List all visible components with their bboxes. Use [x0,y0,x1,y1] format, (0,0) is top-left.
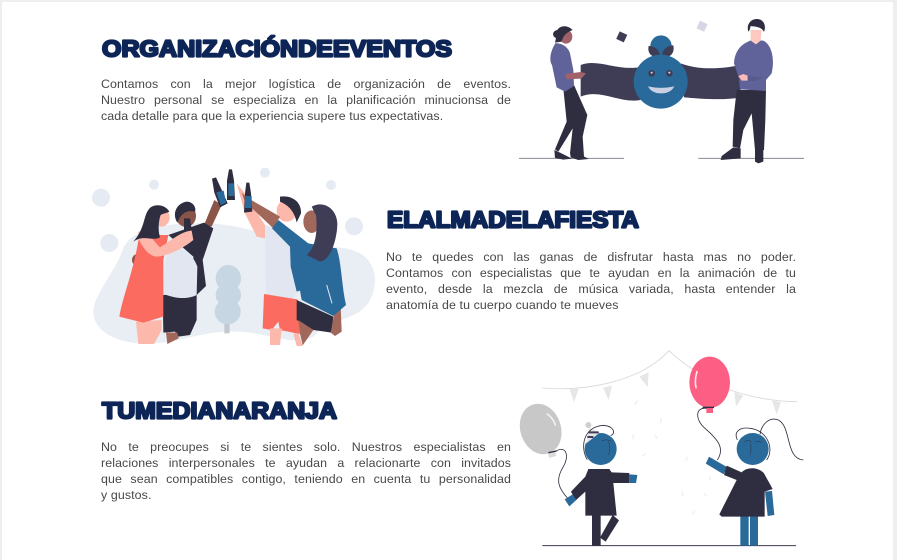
text block: organización de eventos: Contamos con la mejor logística de organización de eventos. [101,77,511,91]
girl [740,515,749,546]
heading: El alma de la fiesta: ELALMADELAFIESTA [387,206,639,232]
text block: tu media naranja: relaciones interpersonales te ayudan a relacionarte con invitados [101,456,511,470]
text block: organización de eventos: cada detalle para que la experiencia supere tus expectativas. [101,109,443,123]
balloons [513,398,568,460]
text block: tu media naranja [101,440,511,502]
heading: Organización de eventos: ORGANIZACIÓNDEEVENTOS [102,34,452,62]
woman [555,85,587,157]
text block: el alma de la fiesta: anatomía de tu cuerpo cuando te mueves [386,298,618,312]
woman in coral dress [136,320,162,344]
bottles [212,169,252,213]
man [733,90,766,150]
text block: el alma de la fiesta: Contamos con especialistas que te ayudan en la animación de tu [386,266,796,280]
text block: el alma de la fiesta [386,250,796,312]
woman in blue jacket [297,300,333,333]
man in vest [163,293,197,337]
text block: tu media naranja: y gustos. [101,488,152,502]
text block: tu media naranja: que sean compatibles contigo, teniendo en cuenta tu personalidad [101,472,511,486]
text block: el alma de la fiesta: No te quedes con las ganas de disfrutar hasta mas no poder. [386,250,796,264]
text block: el alma de la fiesta: evento, desde la mezcla de música variada, hasta entender la [386,282,796,296]
tree [215,265,241,333]
heading: Tu media naranja: TUMEDIANARANJA [102,398,337,424]
boy [592,513,601,546]
man with coral shorts [237,183,265,238]
text block: organización de eventos: Nuestro personal se especializa en la planificación minucionsa de [101,93,511,107]
text block: organización de eventos [101,77,511,123]
text block: tu media naranja: No te preocupes si te sientes solo. Nuestros especialistas en [101,440,511,454]
